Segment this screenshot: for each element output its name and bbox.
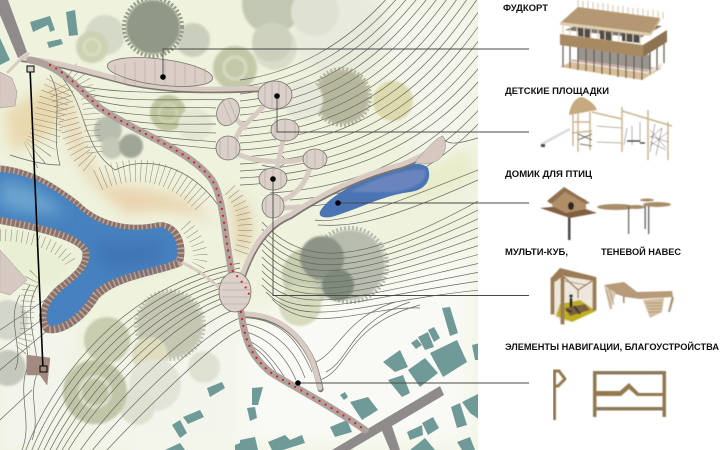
heading: bird house: ДОМИК ДЛЯ ПТИЦ xyxy=(505,169,592,179)
icon: navigation post xyxy=(554,371,565,420)
site plan map xyxy=(0,0,478,450)
buildings xyxy=(0,10,480,450)
icon: shade umbrellas xyxy=(597,198,671,234)
leader: navigation xyxy=(298,382,529,384)
icon: navigation board xyxy=(593,371,666,417)
roads xyxy=(0,0,444,450)
board lines xyxy=(115,60,323,304)
icon: food court pavilion xyxy=(560,0,667,80)
icon: shade canopy structure xyxy=(604,282,674,318)
shadows xyxy=(23,59,439,389)
contour lines xyxy=(0,0,478,450)
icon: bird house xyxy=(540,187,597,240)
heading: playgrounds: ДЕТСКИЕ ПЛОЩАДКИ xyxy=(505,86,609,96)
wooden walkways xyxy=(8,54,438,388)
small pond xyxy=(320,164,429,217)
food court platform xyxy=(107,57,213,87)
trees xyxy=(0,0,413,425)
deck end at small pond xyxy=(415,136,445,164)
leader: food court xyxy=(163,49,529,77)
heading: food court: ФУДКОРТ xyxy=(503,3,549,13)
heading: navigation elements: ЭЛЕМЕНТЫ НАВИГАЦИИ, БЛАГОУСТРОЙСТВА xyxy=(505,341,720,352)
deck paths and platforms xyxy=(0,53,445,430)
playground platforms xyxy=(213,81,327,218)
icon: multi-cube pavilion xyxy=(551,268,596,324)
leader: playgrounds xyxy=(277,96,529,132)
heading: shade canopy: ТЕНЕВОЙ НАВЕС xyxy=(601,246,682,257)
radial hatching slopes xyxy=(0,70,245,352)
leader: bird house xyxy=(338,202,529,204)
icon: playground xyxy=(541,97,672,160)
ground washes xyxy=(0,0,478,450)
leader: multi-cube xyxy=(273,179,529,296)
gravel route xyxy=(30,60,365,430)
heading: multi-cube: МУЛЬТИ-КУБ, xyxy=(505,247,568,257)
left deck fragments xyxy=(0,72,50,385)
plaza xyxy=(219,272,251,312)
leader dots xyxy=(160,74,341,386)
large pond with deck edge xyxy=(0,170,179,328)
red route dots xyxy=(50,65,365,430)
leader lines xyxy=(163,49,529,383)
black section line with markers xyxy=(27,66,47,372)
